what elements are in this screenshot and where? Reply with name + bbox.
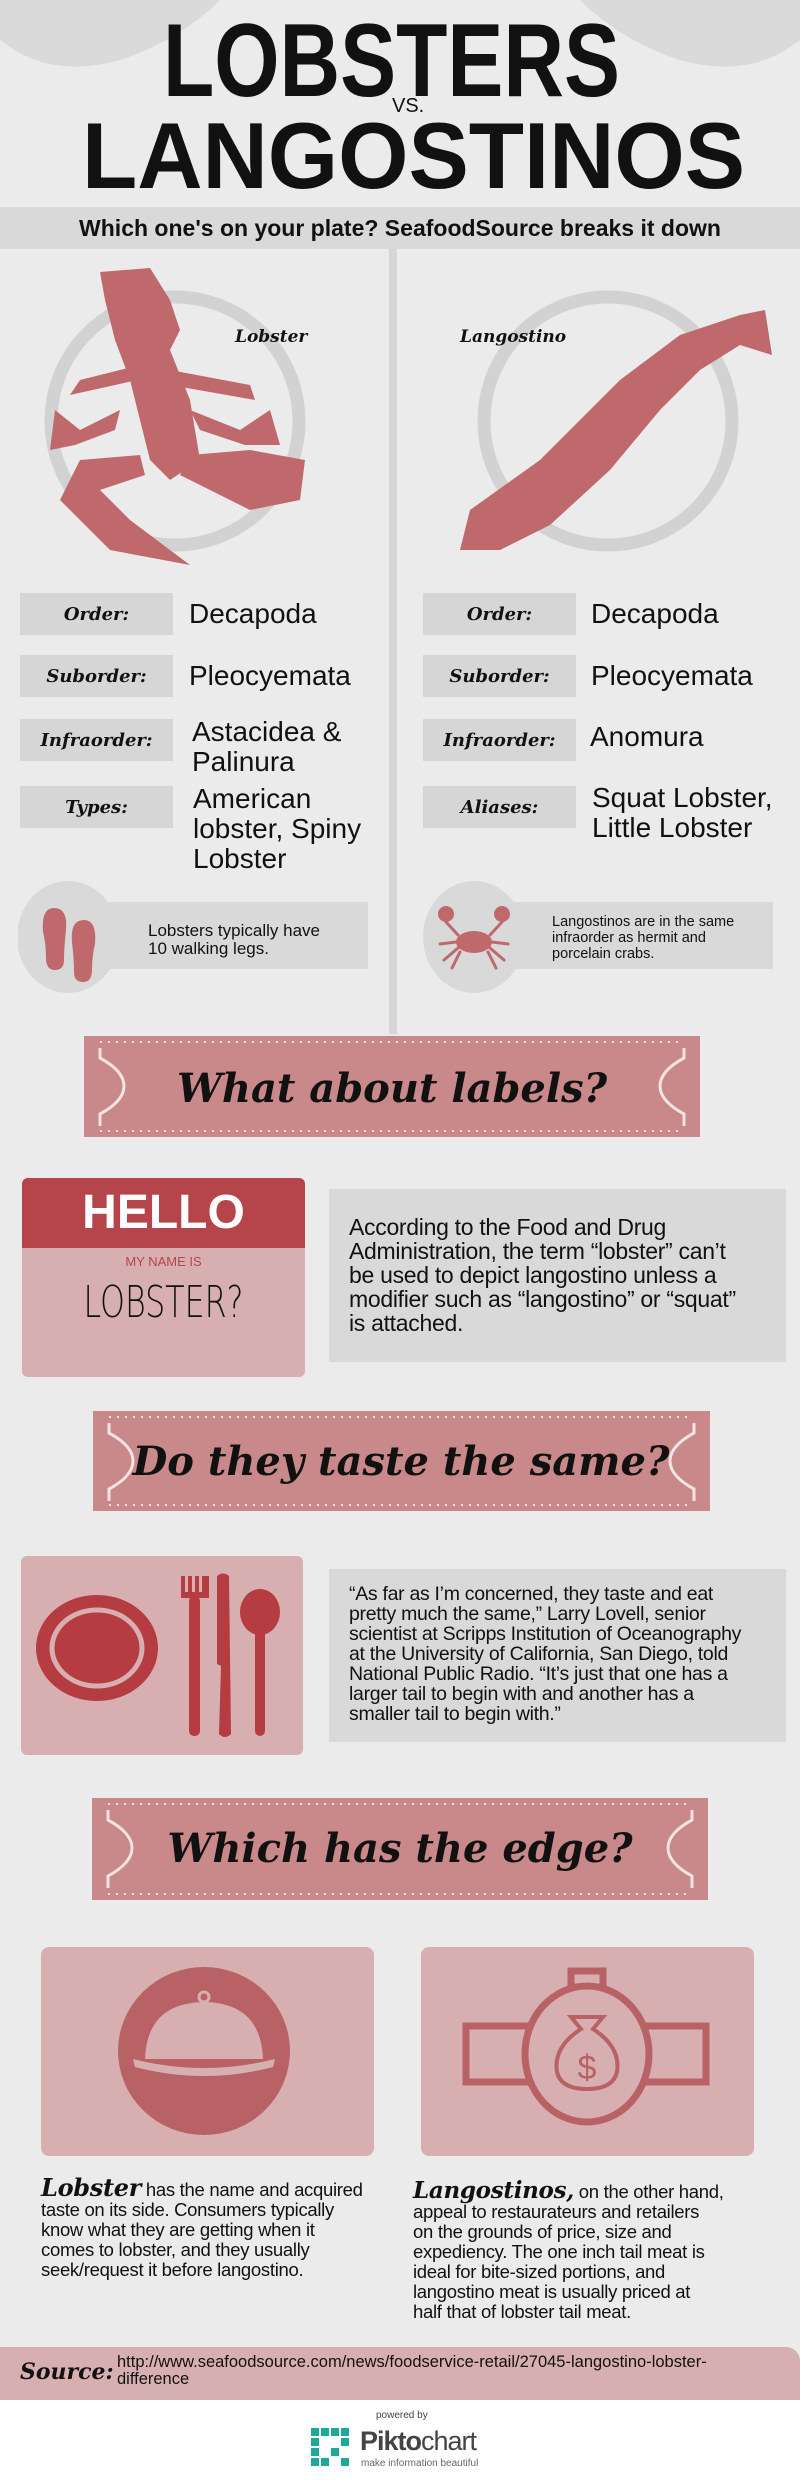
text block: langostino edge: langostino meat is usually priced at	[413, 2281, 690, 2302]
text block: lobster edge	[40, 2173, 363, 2280]
text block: FDA labels: Administration, the term “lobster” can’t	[349, 1238, 726, 1264]
langostino taxonomy rows: Anomura	[590, 721, 704, 752]
row: suborder	[20, 655, 173, 697]
text block: taste quote	[329, 1569, 786, 1742]
lobster taxonomy rows	[20, 593, 361, 874]
title: VS.	[392, 95, 424, 117]
text block: taste quote: “As far as I’m concerned, they taste and eat	[349, 1583, 713, 1605]
row: aliases	[423, 786, 576, 828]
heading: which has the edge	[92, 1798, 708, 1900]
panel: lobster illustration: Lobster	[234, 327, 308, 347]
heading: what about labels	[84, 1036, 700, 1137]
text block: FDA labels	[329, 1189, 786, 1362]
text block: taste quote: smaller tail to begin with.”	[349, 1703, 561, 1725]
langostino taxonomy rows: Squat Lobster,	[592, 782, 773, 813]
text block: taste quote: scientist at Scripps Institution of Oceanography	[349, 1623, 741, 1645]
text block: FDA labels: be used to depict langostino unless a	[349, 1262, 716, 1288]
text block: langostino edge: on the grounds of price, size and	[413, 2221, 672, 2242]
name tag: hello lobster	[22, 1178, 305, 1377]
title: LOBSTERS	[163, 3, 620, 119]
callout: walking legs: 10 walking legs.	[148, 939, 269, 958]
row: infraorder	[20, 719, 173, 761]
panel: langostino illustration: Langostino	[459, 327, 566, 347]
text block: langostino edge: expediency. The one inch tail meat is	[413, 2241, 705, 2262]
lobster taxonomy rows: Palinura	[192, 746, 295, 777]
icon panel: cloche	[41, 1947, 374, 2156]
text block: langostino edge: half that of lobster tail meat.	[413, 2301, 631, 2322]
text block: langostino edge: Langostinos, on the other hand,	[413, 2177, 724, 2204]
callout: walking legs: Lobsters typically have	[148, 921, 320, 940]
source band: http://www.seafoodsource.com/news/foodservice-retail/27045-langostino-lobster-	[117, 2353, 707, 2371]
callout: crab: porcelain crabs.	[552, 946, 654, 962]
row: order	[20, 593, 173, 635]
title	[82, 3, 745, 200]
callout: crab: infraorder as hermit and	[552, 930, 706, 946]
lobster taxonomy rows: Decapoda	[189, 598, 317, 629]
name tag: hello lobster: LOBSTER?	[84, 1277, 243, 1328]
row: aliases: Aliases:	[461, 796, 538, 818]
text block: taste quote: larger tail to begin with and another has a	[349, 1683, 694, 1705]
text block: lobster edge: seek/request it before langostino.	[41, 2259, 303, 2280]
callout: crab	[423, 881, 773, 993]
text block: lobster edge: comes to lobster, and they usually	[41, 2239, 309, 2260]
row: suborder: Suborder:	[449, 666, 550, 686]
lobster taxonomy rows: Astacidea &	[192, 716, 341, 747]
panel: lobster illustration	[44, 268, 308, 565]
footer: piktochart logo	[0, 2400, 800, 2480]
icon: footprints	[18, 881, 110, 993]
source band: Source:	[20, 2359, 114, 2385]
background hands decoration	[0, 0, 800, 66]
row: infraorder: Infraorder:	[443, 730, 556, 750]
heading: which has the edge: Which has the edge?	[167, 1825, 633, 1872]
text block: lobster edge: Lobster has the name and acquired	[41, 2173, 363, 2202]
source band	[0, 2347, 800, 2400]
source band: difference	[117, 2370, 189, 2388]
subtitle band	[0, 207, 800, 249]
text block: taste quote: at the University of California, San Diego, told	[349, 1643, 728, 1665]
callout: crab: Langostinos are in the same	[552, 914, 734, 930]
langostino taxonomy rows: Pleocyemata	[591, 660, 753, 691]
icon panel: plate and cutlery	[21, 1556, 303, 1755]
row: suborder	[423, 655, 576, 697]
lobster taxonomy rows: Pleocyemata	[189, 660, 351, 691]
heading: what about labels: What about labels?	[177, 1065, 608, 1112]
lobster taxonomy rows: Lobster	[193, 843, 286, 874]
footer: piktochart logo: Piktochart	[360, 2426, 476, 2456]
row: infraorder: Infraorder:	[40, 730, 153, 750]
row: types	[20, 786, 173, 828]
text block: FDA labels: is attached.	[349, 1310, 463, 1336]
text block: lobster edge: taste on its side. Consumers typically	[41, 2199, 334, 2220]
icon panel: money watch: $	[578, 2049, 597, 2087]
lobster taxonomy rows: lobster, Spiny	[193, 813, 361, 844]
name tag: hello lobster: HELLO	[82, 1186, 245, 1239]
icon panel: money watch	[421, 1947, 754, 2156]
row: order: Order:	[64, 604, 129, 624]
text block: taste quote: pretty much the same,” Larry Lovell, senior	[349, 1603, 706, 1625]
panel: langostino illustration	[459, 290, 772, 552]
heading: do they taste the same	[93, 1411, 710, 1511]
text block: langostino edge	[412, 2177, 724, 2322]
footer: piktochart logo: make information beautiful	[361, 2458, 478, 2469]
subtitle band: Which one's on your plate? SeafoodSource breaks it down	[79, 215, 721, 241]
row: types: Types:	[65, 796, 128, 818]
divider	[389, 249, 397, 1034]
row: infraorder	[423, 719, 576, 761]
footer: piktochart logo: powered by	[376, 2410, 428, 2421]
text block: langostino edge: ideal for bite-sized portions, and	[413, 2261, 665, 2282]
lobster taxonomy rows: American	[193, 783, 311, 814]
name tag: hello lobster: MY NAME IS	[125, 1254, 202, 1269]
langostino taxonomy rows	[423, 593, 773, 843]
heading: do they taste the same: Do they taste the same?	[132, 1438, 670, 1485]
icon: crab	[423, 881, 516, 993]
langostino taxonomy rows: Little Lobster	[592, 812, 752, 843]
row: order	[423, 593, 576, 635]
text block: lobster edge: know what they are getting when it	[41, 2219, 315, 2240]
text block: taste quote: National Public Radio. “It’s just that one has a	[349, 1663, 728, 1685]
text block: FDA labels: According to the Food and Drug	[349, 1214, 666, 1240]
langostino taxonomy rows: Decapoda	[591, 598, 719, 629]
row: order: Order:	[467, 604, 532, 624]
text block: FDA labels: modifier such as “langostino” or “squat”	[349, 1286, 736, 1312]
row: suborder: Suborder:	[46, 666, 147, 686]
text block: langostino edge: appeal to restaurateurs and retailers	[413, 2201, 699, 2222]
callout: walking legs	[18, 881, 368, 993]
